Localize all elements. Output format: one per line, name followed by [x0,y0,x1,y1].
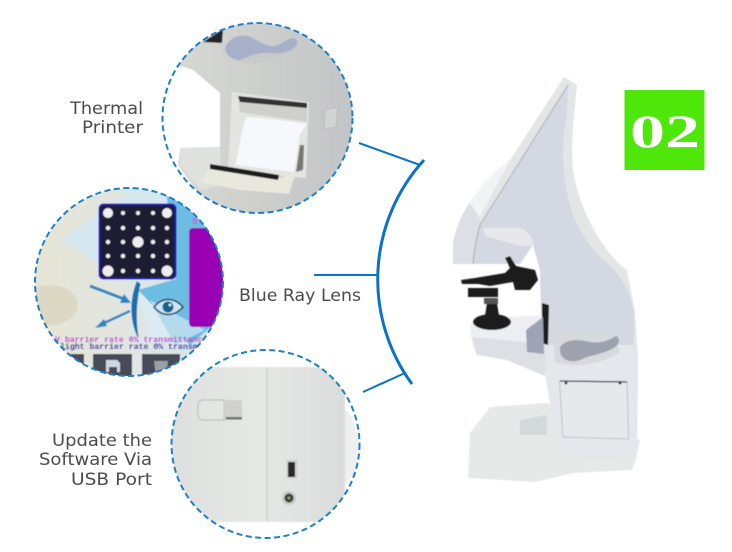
label: blue ray lens: Blue Ray Lens [239,286,361,306]
USB port [286,460,298,478]
black roller [210,164,279,180]
eye icon [154,300,183,314]
smudge [36,285,78,325]
label: update software: Software Via [39,450,152,470]
connector bracket arc [314,143,424,392]
handle [225,35,297,60]
seam [266,367,268,522]
right edge piece [345,410,358,485]
main body side panel [473,85,634,362]
arrows [90,286,124,299]
neck arch [483,228,534,246]
screen text: V barrier rate 0% transmittance100 [55,335,222,345]
badge: 02 [624,90,704,170]
device: lensmeter product photo [453,77,640,482]
device base [468,403,640,482]
panel: blue ray lens screen circle: light barrier rate 0% transmittance [60,342,232,352]
lens curve [132,282,140,337]
flap [200,168,296,194]
panel: blue ray lens screen circle: S: [192,217,203,227]
white background behind printer [162,66,220,190]
printer door [560,381,628,439]
lower body [543,345,637,456]
panel: thermal printer photo circle [150,20,355,215]
lower desk surface [180,147,222,190]
panel: USB port photo circle [165,345,365,540]
label: thermal printer [69,99,143,138]
black lens holder arm [461,256,549,345]
label: update software: USB Port [71,470,152,490]
screen buttons [70,353,180,376]
head front panel [470,160,510,217]
power jack [282,491,296,505]
badge: 02: 02 [630,106,700,158]
label: thermal printer: Printer [82,118,143,138]
body seam [473,85,568,264]
label: thermal printer: Thermal [69,99,143,119]
paper roll [235,117,307,172]
grey block [526,317,544,354]
purple bar [188,228,223,328]
blue light rays [60,189,166,284]
handle [553,332,620,365]
panel: blue ray lens screen circle [34,187,224,377]
label: update software [39,431,152,490]
lens stage black cup [473,298,511,330]
latch [198,400,242,420]
tower silhouette [453,77,638,460]
target chart [100,204,176,278]
lens table [470,315,545,375]
handle shadow [224,50,226,52]
printer opening [228,92,309,178]
side vent [324,107,338,129]
dark corner [203,29,223,43]
label: update software: Update the [52,431,152,451]
